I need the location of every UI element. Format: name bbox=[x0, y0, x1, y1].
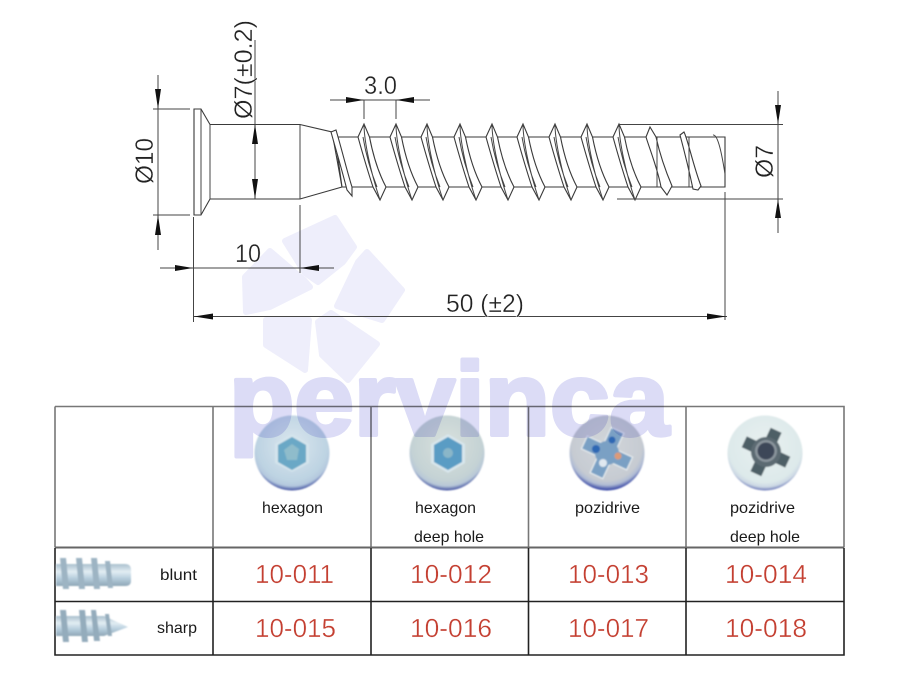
column: pozidrive deep hole: deep hole bbox=[730, 529, 800, 546]
icon: pozidrive head bbox=[570, 416, 644, 490]
column: pozidrive: pozidrive bbox=[575, 500, 640, 517]
row: sharp: 10-016 bbox=[410, 613, 492, 643]
dimension: diameter 7 tolerance 0.2: Ø7(±0.2) bbox=[230, 20, 258, 119]
screw technical drawing bbox=[194, 109, 725, 215]
row: blunt: blunt bbox=[160, 567, 198, 584]
icon: sharp screw tip bbox=[56, 610, 128, 642]
head and shank detail lines bbox=[201, 109, 300, 215]
icon: blunt screw tip bbox=[56, 558, 131, 589]
column: hexagon deep hole: deep hole bbox=[414, 529, 484, 546]
row: sharp: sharp bbox=[157, 620, 197, 637]
dimension: pitch 3.0 bbox=[330, 72, 430, 119]
icon: pozidrive deep hole head bbox=[728, 416, 802, 490]
dimension: diameter 10 bbox=[131, 75, 190, 250]
dimension: diameter 7 tolerance 0.2 bbox=[230, 20, 258, 199]
watermark: pervinca wordmark: pervinca bbox=[229, 342, 670, 458]
dimension: thread diameter 7 bbox=[617, 91, 783, 233]
column: pozidrive deep hole bbox=[728, 416, 802, 546]
screw head and shank bbox=[194, 109, 342, 215]
row: blunt: 10-011 bbox=[255, 559, 334, 589]
row: sharp bbox=[56, 610, 807, 643]
icon: hexagon socket head bbox=[254, 416, 330, 490]
dimension: length 10 bbox=[160, 205, 334, 322]
dimension: total length 50 bbox=[194, 192, 727, 320]
dimension: pitch 3.0: 3.0 bbox=[364, 72, 397, 100]
icon: hexagon deep hole head bbox=[410, 416, 484, 490]
threaded core bbox=[335, 137, 725, 187]
row: blunt: 10-012 bbox=[410, 559, 492, 589]
row: blunt bbox=[56, 558, 807, 589]
column: hexagon bbox=[254, 416, 330, 517]
column: hexagon: hexagon bbox=[262, 500, 323, 517]
row: sharp: 10-015 bbox=[255, 613, 336, 643]
table grid bbox=[55, 406, 844, 655]
dimension: diameter 10: Ø10 bbox=[131, 138, 159, 184]
column: hexagon deep hole: hexagon bbox=[415, 500, 476, 517]
column: pozidrive deep hole: pozidrive bbox=[730, 500, 795, 517]
dimension: length 10: 10 bbox=[235, 240, 261, 268]
column: hexagon deep hole bbox=[410, 416, 484, 546]
row: blunt: 10-013 bbox=[568, 559, 649, 589]
row: blunt: 10-014 bbox=[725, 559, 807, 589]
dimension: total length 50: 50 (±2) bbox=[446, 290, 524, 318]
thread turns bbox=[331, 124, 725, 200]
dimension: thread diameter 7: Ø7 bbox=[751, 145, 779, 178]
watermark: pervinca flower bbox=[245, 218, 402, 380]
product table bbox=[55, 406, 844, 655]
row: sharp: 10-018 bbox=[725, 613, 807, 643]
row: sharp: 10-017 bbox=[568, 613, 649, 643]
column: pozidrive bbox=[570, 416, 644, 517]
